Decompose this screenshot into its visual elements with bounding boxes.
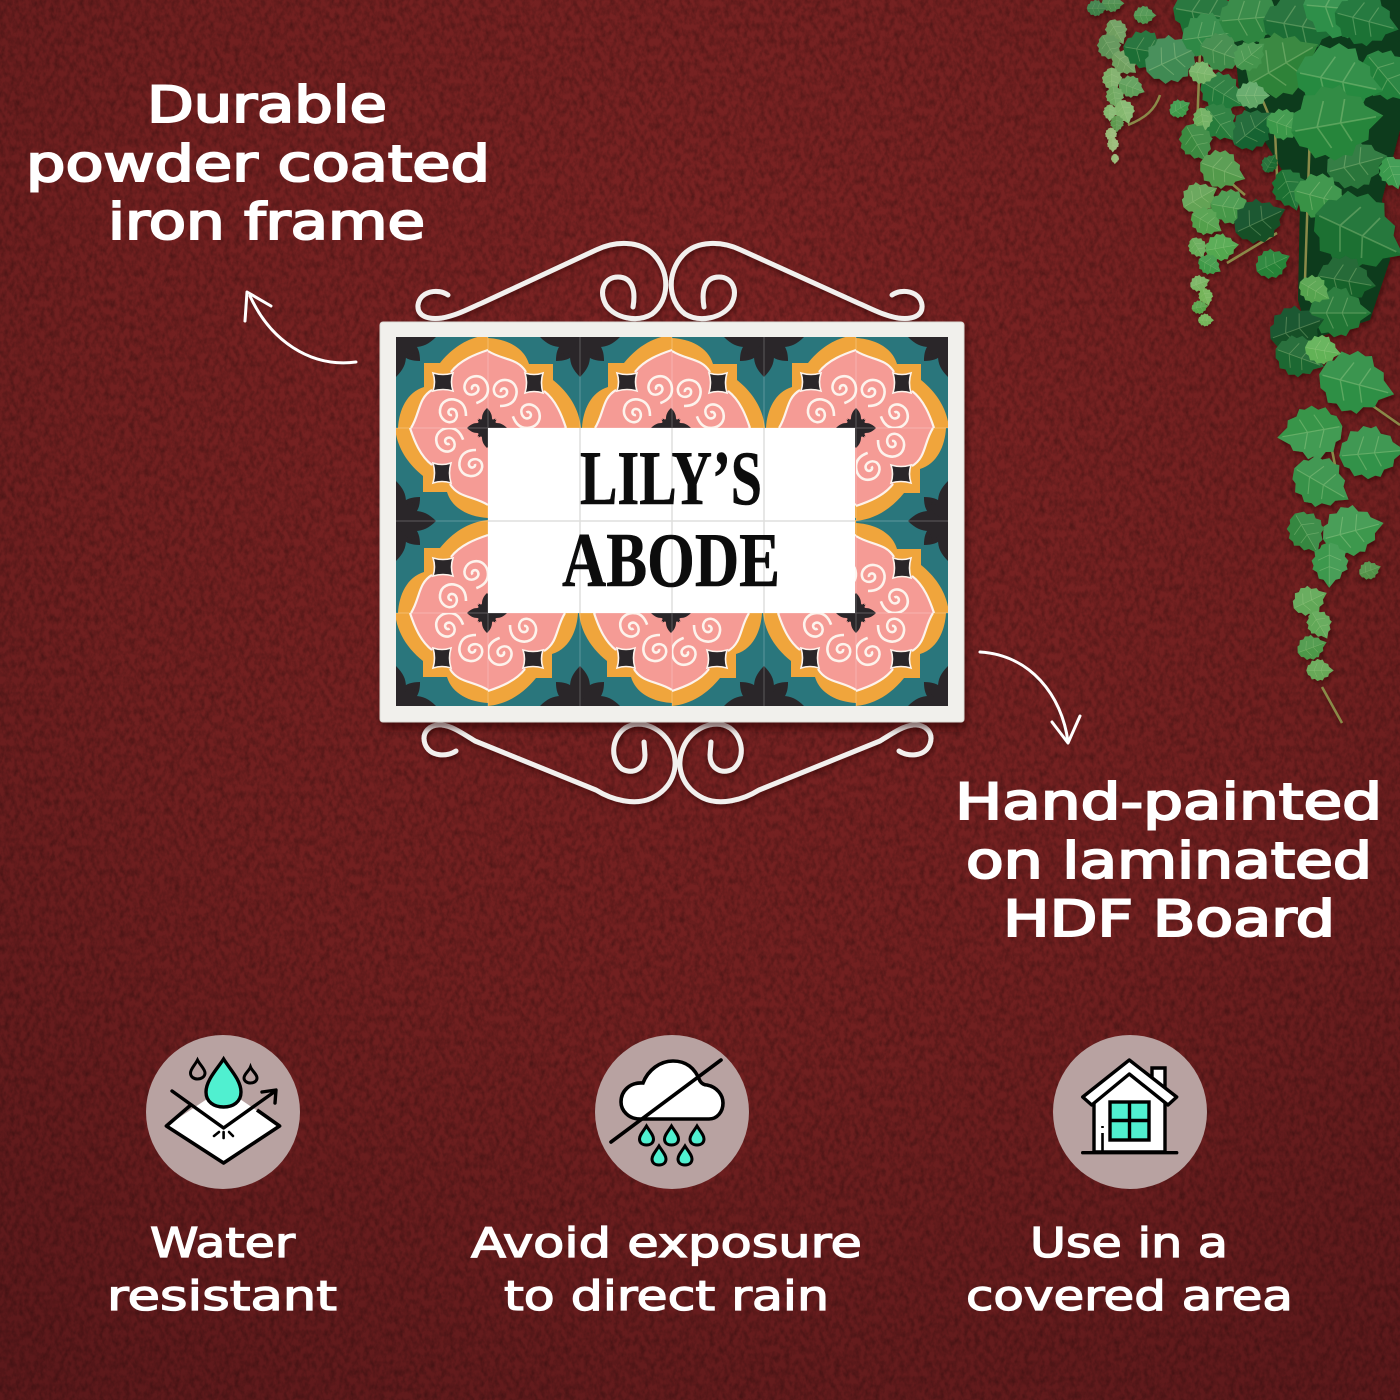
label: water resistant xyxy=(107,1219,337,1320)
iron frame scrollwork: bottom xyxy=(424,724,931,802)
label: covered area xyxy=(966,1219,1293,1320)
tile artwork xyxy=(396,337,948,706)
outer white frame xyxy=(380,322,964,722)
icon: avoid rain xyxy=(595,1035,749,1189)
icon: covered house xyxy=(1053,1035,1207,1189)
heading: board callout xyxy=(955,773,1382,948)
heading: board callout: on laminated xyxy=(966,832,1372,890)
iron frame scrollwork: top xyxy=(418,243,922,319)
heading: board callout: HDF Board xyxy=(1003,890,1335,948)
icon: water resistant xyxy=(146,1035,300,1189)
label: water resistant: Water xyxy=(150,1219,295,1267)
name text: LILY’S xyxy=(580,435,762,521)
name text: ABODE xyxy=(562,517,780,603)
heading: board callout: Hand-painted xyxy=(955,773,1382,831)
arrow: to board callout xyxy=(980,652,1080,743)
label: avoid rain: Avoid exposure xyxy=(471,1219,862,1267)
white name panel xyxy=(488,428,855,613)
label: avoid rain: to direct rain xyxy=(504,1272,829,1320)
label: water resistant: resistant xyxy=(107,1272,337,1320)
heading: frame callout: iron frame xyxy=(108,193,425,251)
heading: frame callout: Durable xyxy=(147,76,387,134)
arrow: to frame callout xyxy=(245,292,356,363)
heading: frame callout: powder coated xyxy=(26,135,490,193)
label: covered area: covered area xyxy=(966,1272,1293,1320)
name text xyxy=(562,435,780,603)
heading: frame callout xyxy=(26,76,490,251)
label: covered area: Use in a xyxy=(1030,1219,1228,1267)
ivy vine xyxy=(1087,0,1400,723)
label: avoid rain xyxy=(471,1219,862,1320)
nameplate: white frame with hand-painted tiles xyxy=(377,322,971,734)
